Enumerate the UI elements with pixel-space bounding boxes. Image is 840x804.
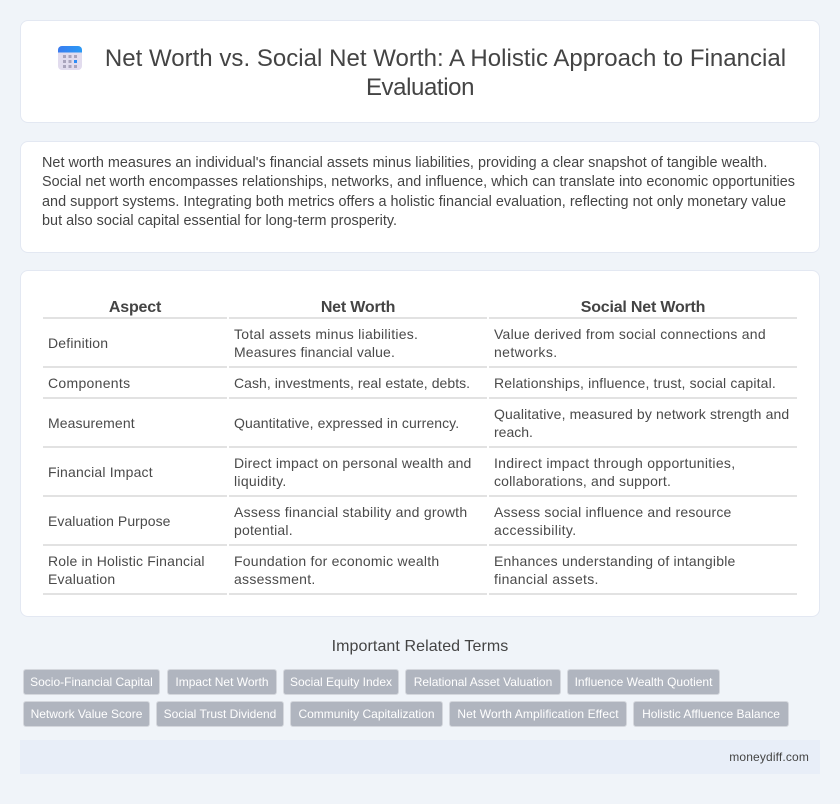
row: evaluation purpose: Evaluation Purpose <box>48 513 170 529</box>
tag: Network Value Score <box>23 701 150 727</box>
tag: Holistic Affluence Balance: Holistic Affluence Balance <box>642 707 780 721</box>
comparison table: Enhances understanding of intangible <box>494 553 736 569</box>
tag: Social Equity Index: Social Equity Index <box>290 675 392 689</box>
comparison table: Foundation for economic wealth <box>234 553 439 569</box>
intro paragraph: Net worth measures an individual's financial assets minus liabilities, providing a clear snapshot of tangible wealth. <box>42 155 767 171</box>
comparison table: reach. <box>494 424 533 440</box>
tag: Holistic Affluence Balance <box>633 701 789 727</box>
related terms heading: Important Related Terms <box>332 638 508 655</box>
tag: Net Worth Amplification Effect <box>449 701 627 727</box>
header card <box>20 20 820 123</box>
tag: Social Trust Dividend: Social Trust Dividend <box>164 707 276 721</box>
tag: Influence Wealth Quotient: Influence Wealth Quotient <box>575 675 712 689</box>
header: net worth: Net Worth <box>321 299 395 316</box>
tag: Socio-Financial Capital: Socio-Financial Capital <box>30 675 153 689</box>
intro paragraph: and support systems. Integrating both metrics offers a holistic financial evaluation, reflecting not only monetary value <box>42 194 786 210</box>
comparison table: Value derived from social connections and <box>494 326 766 342</box>
title <box>105 45 786 101</box>
comparison table: liquidity. <box>234 473 287 489</box>
comparison table: potential. <box>234 522 293 538</box>
tag: Community Capitalization: Community Capitalization <box>298 707 435 721</box>
intro paragraph <box>42 155 795 229</box>
header: aspect: Aspect <box>109 299 161 316</box>
comparison table: collaborations, and support. <box>494 473 671 489</box>
comparison table: Qualitative, measured by network strength and <box>494 406 789 422</box>
intro card <box>20 141 820 253</box>
footer bar <box>20 740 820 774</box>
header: social net worth: Social Net Worth <box>581 299 705 316</box>
row: role in holistic financial evaluation: Role in Holistic Financial <box>48 553 205 569</box>
comparison table: Measures financial value. <box>234 344 395 360</box>
row: definition: Definition <box>48 335 108 351</box>
comparison table: Direct impact on personal wealth and <box>234 455 472 471</box>
tag: Impact Net Worth: Impact Net Worth <box>175 675 269 689</box>
title: Evaluation <box>366 74 474 101</box>
comparison table: financial assets. <box>494 571 599 587</box>
comparison table: Indirect impact through opportunities, <box>494 455 735 471</box>
comparison table: accessibility. <box>494 522 576 538</box>
row: role in holistic financial evaluation: Evaluation <box>48 571 115 587</box>
title: Net Worth vs. Social Net Worth: A Holistic Approach to Financial <box>105 45 786 72</box>
tag: Network Value Score: Network Value Score <box>31 707 142 721</box>
comparison table: networks. <box>494 344 558 360</box>
tag: Relational Asset Valuation <box>405 669 561 695</box>
row: measurement: Measurement <box>48 415 135 431</box>
comparison table <box>43 299 797 595</box>
tag: Impact Net Worth <box>167 669 277 695</box>
tag: Influence Wealth Quotient <box>567 669 720 695</box>
intro paragraph: but also social capital essential for long-term prosperity. <box>42 213 397 229</box>
comparison table: Relationships, influence, trust, social capital. <box>494 375 776 391</box>
tag: Community Capitalization <box>290 701 443 727</box>
comparison table: Assess financial stability and growth <box>234 504 467 520</box>
row: role in holistic financial evaluation <box>48 553 205 587</box>
tag: Social Equity Index <box>283 669 399 695</box>
icon: calendar <box>58 46 82 70</box>
tag: Socio-Financial Capital <box>23 669 160 695</box>
comparison table: Assess social influence and resource <box>494 504 732 520</box>
footer source text: moneydiff.com <box>729 750 809 764</box>
comparison table: Quantitative, expressed in currency. <box>234 415 459 431</box>
comparison table: assessment. <box>234 571 316 587</box>
comparison table: Cash, investments, real estate, debts. <box>234 375 470 391</box>
tag: Social Trust Dividend <box>156 701 284 727</box>
intro paragraph: Social net worth encompasses relationships, networks, and influence, which can translate into economic opportunities <box>42 174 795 190</box>
table card <box>20 270 820 617</box>
tag: Net Worth Amplification Effect: Net Worth Amplification Effect <box>457 707 619 721</box>
row: financial impact: Financial Impact <box>48 464 153 480</box>
comparison table: Total assets minus liabilities. <box>234 326 418 342</box>
tag: Relational Asset Valuation: Relational Asset Valuation <box>414 675 552 689</box>
row: components: Components <box>48 375 130 391</box>
